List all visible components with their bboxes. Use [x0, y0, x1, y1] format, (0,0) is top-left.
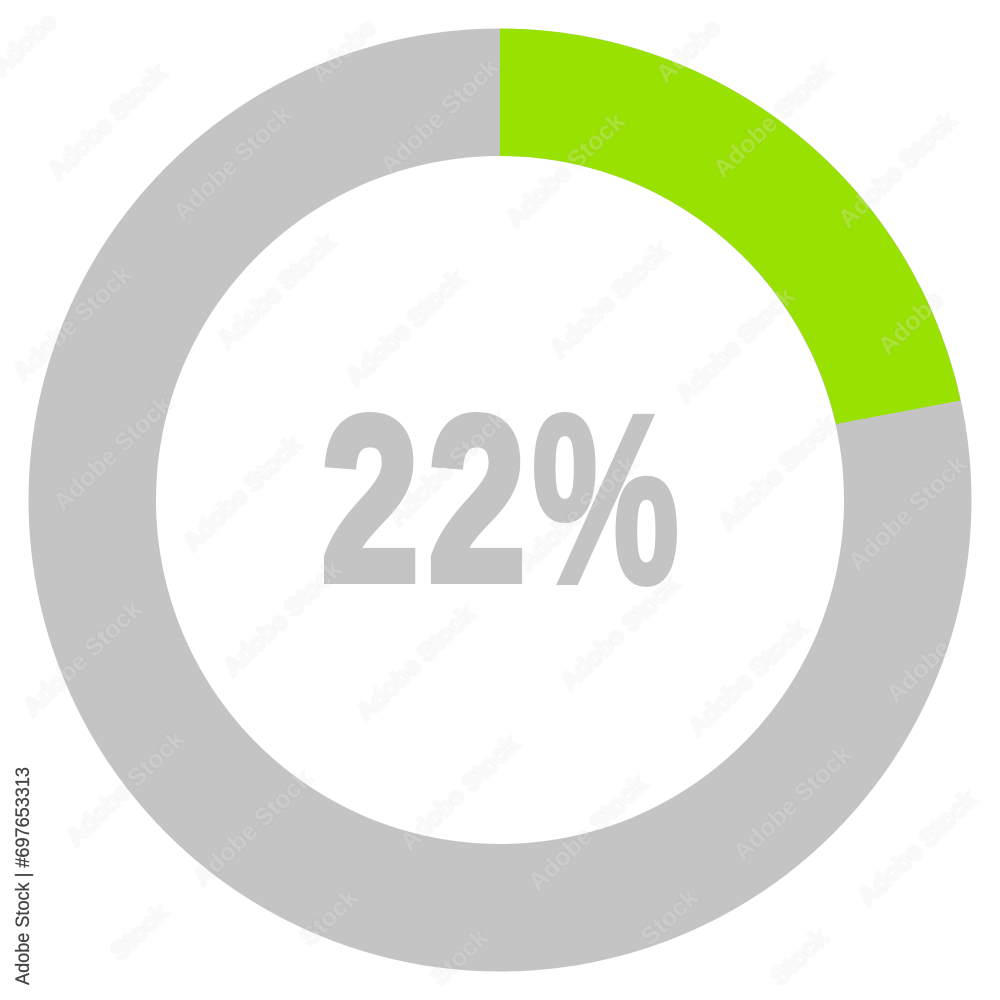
watermark pattern: Adobe Stock [168, 100, 297, 226]
watermark pattern: Stock [765, 923, 834, 991]
watermark pattern: Adobe Stock [383, 405, 512, 531]
watermark pattern: Adobe [881, 634, 956, 708]
watermark pattern: Adobe Stock [708, 57, 837, 183]
watermark pattern: Adobe Stock [8, 260, 137, 386]
watermark pattern: Adobe Stock [555, 570, 684, 696]
watermark pattern: Adobe Stock [513, 450, 642, 576]
watermark pattern: Stock [425, 923, 494, 991]
watermark pattern: Adobe Stock [728, 740, 857, 866]
watermark pattern: Adobe [306, 14, 381, 88]
watermark pattern: Adobe Stock [48, 390, 177, 516]
watermark pattern: Adobe Stock [341, 265, 470, 391]
watermark pattern: Adobe Stock [188, 765, 317, 891]
watermark pattern: Adobe Stock [523, 770, 652, 896]
percent sign: % [532, 364, 679, 633]
stock id label: Adobe Stock | #697653313 [13, 767, 34, 985]
watermark pattern: Adobe [873, 286, 948, 360]
watermark pattern: Adobe Stock [843, 450, 972, 576]
watermark pattern: Adobe Stock [501, 107, 630, 233]
watermark pattern: Adobe Stock [43, 59, 172, 185]
watermark pattern: Adobe [651, 14, 726, 88]
watermark pattern: Adobe Stock [61, 725, 190, 851]
watermark pattern: Adobe Stock [853, 785, 982, 911]
watermark pattern: Adobe Stock [713, 410, 842, 536]
watermark pattern: Adobe Stock [218, 555, 347, 681]
watermark pattern: Stock [635, 883, 704, 951]
digits 22: 22 [322, 370, 525, 629]
center value: 22% [322, 364, 679, 633]
watermark pattern: Stock [105, 898, 174, 966]
watermark pattern: Adobe Stock [178, 430, 307, 556]
watermark pattern: Adobe Stock [351, 600, 480, 726]
watermark pattern: Adobe Stock [683, 615, 812, 741]
watermark pattern: Adobe Stock [833, 107, 962, 233]
watermark pattern: Adobe Stock [545, 237, 674, 363]
watermark pattern: Adobe Stock [212, 228, 341, 354]
watermark pattern: Adobe Stock [395, 730, 524, 856]
ring segment: 22% green [500, 28, 960, 424]
watermark pattern: Adobe Stock [375, 53, 504, 179]
watermark pattern: Adobe Stock [18, 595, 147, 721]
watermark pattern: Adobe Stock [671, 282, 800, 408]
watermark pattern: Stock [295, 883, 364, 951]
